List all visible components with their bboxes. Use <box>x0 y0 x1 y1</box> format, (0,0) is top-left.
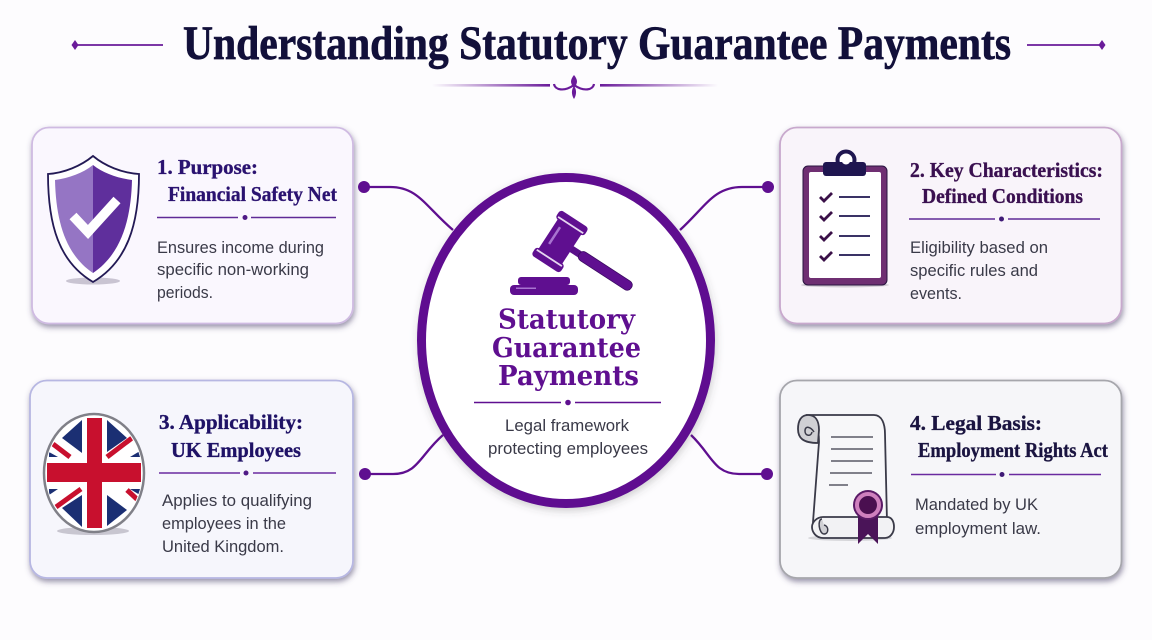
heading: Employment Rights Act <box>918 438 1108 462</box>
center title: Guarantee <box>492 333 641 364</box>
heading <box>159 410 303 462</box>
center description: protecting employees <box>488 439 648 458</box>
heading: 2. Key Characteristics: <box>910 158 1103 182</box>
body text: employment law. <box>915 519 1041 538</box>
body text: United Kingdom. <box>162 537 284 556</box>
heading: Defined Conditions <box>922 184 1083 208</box>
ornament under title <box>432 75 718 99</box>
panel: legal basis <box>780 380 1122 578</box>
connector: purpose <box>358 181 453 230</box>
body text: Ensures income during <box>157 238 324 257</box>
central circle <box>422 178 710 504</box>
center title: Payments <box>498 361 639 392</box>
divider <box>157 215 336 220</box>
center description: Legal framework <box>505 416 629 435</box>
connector: applicability <box>359 435 443 480</box>
icon: clipboard <box>801 152 889 288</box>
body text <box>910 238 1048 303</box>
title flourish: right <box>1027 40 1106 50</box>
heading: 4. Legal Basis: <box>910 411 1042 435</box>
heading: 1. Purpose: <box>157 155 258 179</box>
body text <box>915 495 1041 538</box>
panel: key characteristics <box>780 128 1122 324</box>
panel: applicability <box>30 380 353 578</box>
body text: specific rules and <box>910 261 1038 280</box>
body text: Applies to qualifying <box>162 491 312 510</box>
divider <box>909 216 1100 222</box>
connector: legal basis <box>691 435 773 480</box>
body text <box>162 491 312 556</box>
divider <box>911 472 1101 477</box>
divider <box>474 400 661 405</box>
body text: events. <box>910 284 962 303</box>
icon: shield <box>48 156 139 284</box>
icon: gavel <box>510 210 646 310</box>
heading <box>157 155 337 206</box>
body text: specific non-working <box>157 260 309 279</box>
title flourish: left <box>72 40 163 50</box>
body text: employees in the <box>162 514 286 533</box>
heading <box>910 411 1108 462</box>
heading: 3. Applicability: <box>159 410 303 434</box>
divider <box>159 470 336 476</box>
center title: Statutory <box>498 304 636 336</box>
body text <box>157 238 324 302</box>
panel: purpose <box>32 128 353 324</box>
body text: Mandated by UK <box>915 495 1039 514</box>
icon: scroll with seal <box>798 415 894 544</box>
body text: Eligibility based on <box>910 238 1048 257</box>
body text: periods. <box>157 283 213 302</box>
icon: UK flag <box>44 414 144 535</box>
heading: Financial Safety Net <box>168 182 337 206</box>
center title <box>492 304 641 392</box>
connector: key characteristics <box>680 181 774 230</box>
title: Understanding Statutory Guarantee Payments <box>183 17 1011 70</box>
center description <box>488 416 648 458</box>
heading <box>910 158 1103 208</box>
heading: UK Employees <box>171 438 301 462</box>
